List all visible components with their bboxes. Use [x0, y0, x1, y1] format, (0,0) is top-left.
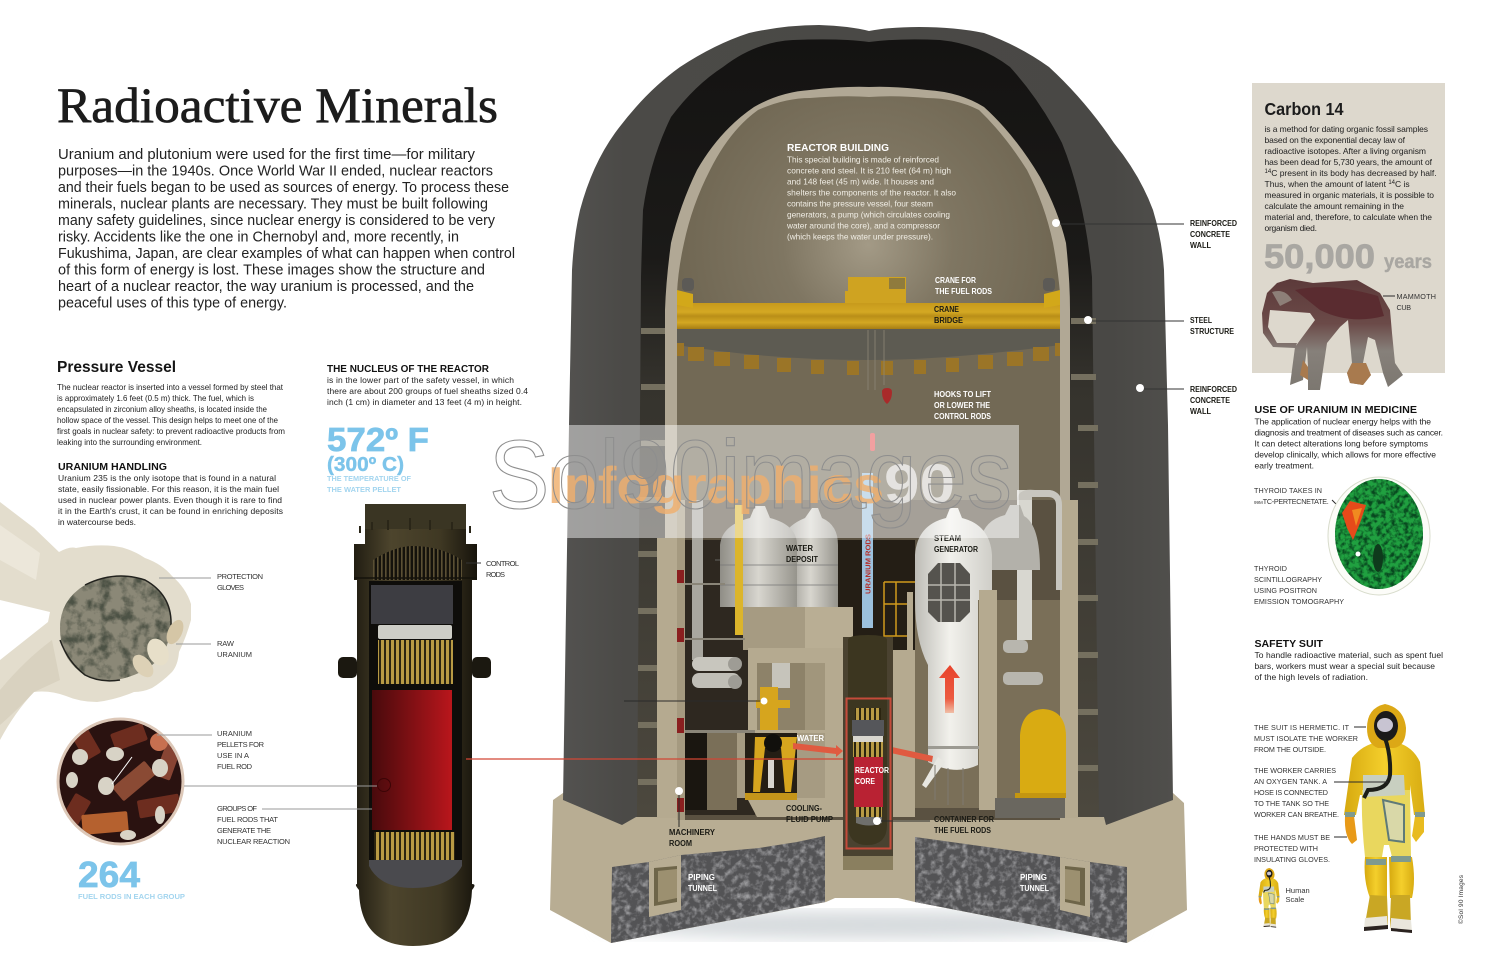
text block: carbon 14: organism died.	[1264, 223, 1317, 233]
label: container: CONTAINER FOR	[934, 815, 994, 824]
machinery dot and leader	[678, 791, 680, 827]
label: reinforced concrete wall top	[1190, 219, 1237, 250]
label: oxygen tank: AN OXYGEN TANK. A	[1254, 777, 1327, 786]
text block: pressure vessel: hollow space of the vessel. This design helps to meet one of the	[57, 415, 278, 425]
text block: safety suit: of the high levels of radiation.	[1254, 672, 1368, 682]
label: reactor building text: generators, a pump (which circulates cooling	[787, 210, 950, 220]
label: cooling-fluid pump: COOLING-	[786, 804, 822, 813]
label: mammoth cub: CUB	[1396, 303, 1411, 312]
label: hands protected: INSULATING GLOVES.	[1254, 855, 1330, 864]
text block: medicine: diagnosis and treatment of diseases such as cancer.	[1254, 428, 1443, 438]
label: raw uranium: RAW	[217, 639, 235, 648]
label: piping tunnel left	[688, 873, 717, 893]
label: reinforced concrete wall lower	[1190, 385, 1237, 416]
label: protection gloves: GLOVES	[217, 583, 244, 592]
label: uranium pellets	[217, 729, 265, 771]
text block: uranium handling: state, easily fissionable. For this reason, it is the main fuel	[58, 484, 279, 494]
text block: pressure vessel: is approximately 1.6 feet (0.5 m) thick. The fuel, which is	[57, 393, 254, 403]
label: suit is hermetic: FROM THE OUTSIDE.	[1254, 745, 1326, 754]
label: thyroid scintillography: EMISSION TOMOGRAPHY	[1254, 597, 1344, 606]
crane supports	[677, 343, 1060, 375]
label: oxygen tank	[1254, 766, 1339, 819]
concrete wall band	[665, 87, 1070, 817]
red boxes	[677, 570, 684, 812]
label: reinforced concrete wall top: REINFORCED	[1190, 219, 1237, 228]
illustration: mammoth cub	[1262, 279, 1403, 390]
panel: safety suit	[1254, 639, 1443, 682]
intro text: of this form of energy is lost. These images show the structure and	[58, 262, 485, 278]
label: uranium pellets: FUEL ROD	[217, 762, 253, 771]
label: container: THE FUEL RODS	[934, 826, 991, 835]
callout: 264 fuel rods: FUEL RODS IN EACH GROUP	[78, 892, 185, 901]
intro text: minerals, nuclear plants are necessary. They must be built following	[58, 196, 488, 212]
label: control rods: CONTROL	[486, 559, 519, 568]
label: mammoth cub	[1383, 292, 1436, 312]
illustration: worker in safety suit	[1344, 704, 1425, 933]
callout: 264 fuel rods	[78, 854, 185, 901]
callout: 264 fuel rods: 264	[78, 854, 140, 895]
label: steam generator: GENERATOR	[934, 545, 978, 554]
left dark room	[685, 540, 755, 815]
outlet arrow	[886, 746, 933, 762]
illustration: gloved hands holding raw uranium	[0, 502, 191, 740]
label: reactor building text: contains the pressure vessel, four steam	[787, 198, 933, 208]
label: hooks: CONTROL RODS	[934, 412, 991, 421]
container dot and leader	[877, 820, 930, 822]
label: mammoth cub: MAMMOTH	[1396, 292, 1436, 301]
label: reactor building text: concrete and steel. It is 210 feet (64 m) high	[787, 166, 951, 176]
panel: pressure vessel text	[57, 359, 285, 447]
label: piping tunnel left: PIPING	[688, 873, 715, 882]
label: hands protected: PROTECTED WITH	[1254, 844, 1318, 853]
valves	[1003, 640, 1028, 653]
label: reactor core: CORE	[855, 777, 875, 786]
water arrow left	[793, 743, 843, 757]
callout: temperature 572 F: (300º C)	[327, 454, 404, 476]
label: uranium pellets: URANIUM	[217, 729, 252, 738]
label: crane for the fuel rods: THE FUEL RODS	[935, 287, 992, 296]
text block: safety suit	[1254, 650, 1443, 682]
label: groups of fuel rods: GENERATE THE	[217, 826, 271, 835]
ladder rungs	[638, 318, 1098, 785]
left pillar	[657, 538, 685, 818]
intro text: heart of a nuclear reactor, the way uranium is processed, and the	[58, 278, 474, 295]
heading: safety suit: SAFETY SUIT	[1254, 639, 1323, 650]
label: thyroid scintillography: USING POSITRON	[1254, 586, 1317, 595]
intro text: Uranium and plutonium were used for the first time—for military	[58, 146, 475, 163]
platform floors	[685, 638, 745, 640]
text block: carbon 14: calculate the amount remaining in the	[1264, 201, 1404, 211]
panel: use of uranium in medicine	[1254, 405, 1443, 470]
label: raw uranium	[217, 639, 252, 659]
label: reactor building text: This special building is made of reinforced	[787, 154, 939, 164]
small core	[852, 708, 884, 826]
label: hooks	[934, 390, 991, 421]
label: reactor building text: shelters the components of the reactor. It also	[787, 188, 956, 198]
label: thyroid scintillography	[1254, 564, 1344, 606]
text block: medicine: It can detect alterations long before symptoms	[1254, 438, 1428, 448]
steam generator	[915, 508, 992, 805]
ground shadow	[599, 911, 1139, 939]
text block: carbon 14: measured in organic materials, it is possible to	[1264, 190, 1434, 200]
text block: nucleus: there are about 200 groups of fuel sheaths sized 0.4	[327, 386, 528, 396]
label: crane bridge: BRIDGE	[934, 316, 963, 325]
text block: pressure vessel: first goals in nuclear safety: to prevent radioactive products from	[57, 426, 285, 436]
callout: 50,000 years: 50,000	[1264, 238, 1375, 276]
right room	[915, 600, 1060, 808]
intro text: and their fuels began to be used as sources of energy. To process these	[58, 179, 509, 196]
intro text	[58, 146, 515, 312]
label: reinforced concrete wall lower: REINFORCED	[1190, 385, 1237, 394]
center dark back	[827, 540, 915, 650]
text block: medicine: develop clinically, which allows for more effective	[1254, 450, 1436, 460]
reactor well	[843, 637, 893, 870]
blue uranium rods bar	[862, 473, 873, 628]
intro text: risky. Accidents like the one in Chernobyl and, more recently, in	[58, 228, 459, 246]
text block: pressure vessel	[57, 382, 285, 447]
beige core walls	[748, 648, 915, 817]
label: hands protected: THE HANDS MUST BE	[1254, 833, 1330, 842]
label: water deposit: DEPOSIT	[786, 555, 818, 564]
label: human scale	[1286, 886, 1310, 904]
label: oxygen tank: THE WORKER CARRIES	[1254, 766, 1336, 775]
text block: uranium handling: used in nuclear power plants. Even though it is rare to find	[58, 495, 282, 505]
granite left	[611, 836, 825, 943]
crane bridge	[677, 277, 1060, 404]
red horizontal line	[466, 758, 846, 760]
label: cooling-fluid pump: FLUID PUMP	[786, 815, 833, 824]
label: oxygen tank: HOSE IS CONNECTED	[1254, 788, 1328, 797]
illustration: uranium pellets circle	[55, 715, 187, 847]
label: steel structure	[1190, 316, 1234, 336]
watermark band: 90	[884, 452, 955, 515]
leader lines: suit	[1334, 727, 1388, 837]
text block: pressure vessel: The nuclear reactor is inserted into a vessel formed by steel that	[57, 382, 284, 392]
label: machinery room: MACHINERY	[669, 828, 716, 837]
dark gap	[637, 39, 1099, 817]
panel: nucleus of the reactor text	[327, 364, 528, 407]
label: piping tunnel right	[1020, 873, 1049, 893]
title: Radioactive Minerals	[57, 77, 498, 133]
label: container	[934, 815, 994, 835]
panel: uranium handling text	[58, 462, 283, 527]
label: steel structure: STEEL	[1190, 316, 1212, 325]
label: thyroid takes in	[1254, 486, 1340, 508]
text block: safety suit: To handle radioactive material, such as spent fuel	[1254, 650, 1443, 660]
text block: carbon 14: based on the exponential decay law of	[1264, 135, 1406, 145]
leader lines: left labels	[157, 563, 481, 809]
intro text: peaceful uses of this type of energy.	[58, 294, 287, 312]
crane cart	[845, 277, 906, 303]
text block: nucleus: is in the lower part of the safety vessel, in which	[327, 375, 514, 385]
label: steam generator	[934, 534, 978, 554]
piping tunnel right	[1060, 857, 1090, 917]
text block: medicine: early treatment.	[1254, 460, 1314, 470]
text block: safety suit: bars, workers must wear a special suit because	[1254, 661, 1435, 671]
label: steel structure: STRUCTURE	[1190, 327, 1234, 336]
label: reinforced concrete wall top: CONCRETE	[1190, 230, 1230, 239]
label: thyroid takes in: THYROID TAKES IN	[1254, 486, 1322, 495]
label: groups of fuel rods: GROUPS OF	[217, 804, 257, 813]
text block: pressure vessel: leaking into the surrounding environment.	[57, 437, 202, 447]
callout: 50,000 years: years	[1384, 252, 1432, 273]
label: cooling-fluid pump	[786, 804, 833, 824]
callout: temperature 572 F: THE WATER PELLET	[327, 485, 401, 494]
label: thyroid takes in: 99MTC-PERTECNETATE.	[1254, 497, 1329, 506]
label: oxygen tank: TO THE TANK SO THE	[1254, 799, 1329, 808]
text block: uranium handling: it in the Earth's crust, it can be found in enriching deposits	[58, 506, 283, 516]
base foundation	[550, 793, 1187, 943]
pressure vessel small	[848, 635, 887, 845]
outer concrete shell	[563, 25, 1173, 825]
text block: uranium handling	[58, 473, 283, 527]
granite right	[915, 837, 1127, 943]
text block: nucleus	[327, 375, 528, 407]
label: control rods: RODS	[486, 570, 505, 579]
callout: temperature 572 F: 572º F	[327, 421, 429, 458]
credit: ©Sol 90 Images	[1457, 874, 1465, 924]
label: reactor core	[855, 766, 889, 786]
label: hooks: HOOKS TO LIFT	[934, 390, 991, 399]
back wall lower	[685, 500, 1060, 820]
intro text: purposes—in the 1940s. Once World War II ended, nuclear reactors	[58, 162, 493, 180]
label: reactor building text: REACTOR BUILDING	[787, 143, 889, 154]
label: human scale: Scale	[1286, 895, 1304, 904]
yellow tank	[1020, 709, 1066, 793]
label: piping tunnel left: TUNNEL	[688, 884, 717, 893]
heading: pressure vessel: Pressure Vessel	[57, 359, 176, 376]
heading: uranium handling: URANIUM HANDLING	[58, 462, 167, 473]
yellow scaffold	[884, 582, 915, 636]
intro text: Fukushima, Japan, are clear examples of what can happen when control	[58, 245, 515, 262]
text block: carbon 14: radioactive isotopes. After a living organism	[1264, 146, 1426, 156]
beige platform	[743, 607, 853, 650]
yellow pipe	[735, 505, 743, 635]
label: reactor building text: water around the core), and a compressor	[786, 220, 940, 230]
label: machinery room: ROOM	[669, 839, 692, 848]
illustration: brain scan	[1328, 477, 1430, 595]
icon: human scale figure	[1258, 868, 1280, 928]
callout: 50,000 years	[1264, 238, 1432, 276]
text block: carbon 14: has been dead for 5,730 years, the amount of	[1264, 157, 1433, 167]
watermark band: Infographics	[548, 457, 884, 515]
label: suit is hermetic: THE SUIT IS HERMETIC. IT	[1254, 723, 1350, 732]
label: reactor building text: (which keeps the water under pressure).	[787, 232, 933, 242]
label: water deposit	[786, 544, 818, 564]
text block: uranium handling: in watercourse beds.	[58, 517, 136, 527]
label: reinforced concrete wall top: WALL	[1190, 241, 1211, 250]
label: thyroid scintillography: SCINTILLOGRAPHY	[1254, 575, 1322, 584]
heading: medicine: USE OF URANIUM IN MEDICINE	[1254, 405, 1417, 416]
callout: temperature 572 F	[327, 421, 429, 494]
uranium rods label: URANIUM RODS	[864, 534, 872, 594]
text block: carbon 14: is a method for dating organic fossil samples	[1264, 124, 1428, 134]
label: steam generator: STEAM	[934, 534, 961, 543]
label: crane bridge: CRANE	[934, 305, 959, 314]
label: control rods	[486, 559, 519, 579]
label: groups of fuel rods: NUCLEAR REACTION	[217, 837, 290, 846]
label: crane for the fuel rods: CRANE FOR	[935, 276, 976, 285]
red frame	[846, 698, 890, 848]
label: reactor building text	[786, 143, 956, 242]
label: groups of fuel rods	[217, 804, 290, 846]
text block: medicine: The application of nuclear energy helps with the	[1254, 416, 1431, 426]
label: water: WATER	[797, 734, 824, 743]
label: oxygen tank: WORKER CAN BREATHE.	[1254, 810, 1339, 819]
label: hands protected	[1254, 833, 1330, 864]
label: machinery room	[669, 828, 716, 848]
label: piping tunnel right: TUNNEL	[1020, 884, 1049, 893]
lower left room	[685, 733, 707, 810]
label: suit is hermetic	[1254, 723, 1358, 754]
text block: carbon 14: 14C present in its body has decreased by half.	[1264, 168, 1437, 178]
intro text: many safety guidelines, since nuclear energy is considered to be very	[58, 212, 495, 229]
label: crane bridge	[934, 305, 963, 325]
beige wall right	[979, 590, 997, 810]
horizontal pipes	[692, 657, 742, 689]
callout: temperature 572 F: THE TEMPERATURE OF	[327, 474, 411, 483]
label: crane for the fuel rods	[935, 276, 992, 296]
text block: nucleus: inch (1 cm) in diameter and 13 feet (4 m) in height.	[327, 397, 522, 407]
pump dot and leader	[624, 700, 764, 702]
label: protection gloves: PROTECTION	[217, 572, 263, 581]
label: raw uranium: URANIUM	[217, 650, 252, 659]
label: protection gloves	[217, 572, 263, 592]
dome interior	[677, 96, 1060, 817]
label: reactor building text: and 148 feet (45 m) wide. It houses and	[787, 176, 934, 186]
cooling pump	[745, 687, 797, 800]
label: piping tunnel right: PIPING	[1020, 873, 1047, 882]
steam generator back	[980, 505, 1040, 570]
water tanks	[715, 506, 838, 607]
label: reinforced concrete wall lower: CONCRETE	[1190, 396, 1230, 405]
label: water deposit: WATER	[786, 544, 813, 553]
illustration: reactor vessel cutaway	[338, 504, 491, 946]
dots and leaders: wall labels	[1052, 219, 1184, 392]
heading: nucleus of the reactor: THE NUCLEUS OF THE REACTOR	[327, 364, 490, 375]
label: reactor core: REACTOR	[855, 766, 889, 775]
text block: carbon 14: Thus, when the amount of latent 14C is	[1264, 179, 1410, 189]
hook	[868, 330, 884, 390]
heading: carbon 14: Carbon 14	[1264, 99, 1344, 119]
text block: pressure vessel: encapsulated in zirconium alloy sheaths, is located inside the	[57, 404, 267, 414]
watermark band: Sol90images	[489, 420, 1012, 529]
label: groups of fuel rods: FUEL RODS THAT	[217, 815, 278, 824]
label: uranium pellets: PELLETS FOR	[217, 740, 265, 749]
piping tunnel left	[649, 855, 681, 917]
illustration: reactor building cutaway	[466, 25, 1187, 943]
text block: medicine	[1254, 416, 1443, 470]
label: human scale: Human	[1286, 886, 1310, 895]
panel: carbon 14	[1252, 83, 1445, 373]
label: thyroid scintillography: THYROID	[1254, 564, 1287, 573]
text block: carbon 14: material and, therefore, to calculate when the	[1264, 212, 1432, 222]
text block: uranium handling: Uranium 235 is the only isotope that is found in a natural	[58, 473, 276, 483]
label: uranium pellets: USE IN A	[217, 751, 249, 760]
right pillar	[1060, 500, 1078, 818]
label: hooks: OR LOWER THE	[934, 401, 990, 410]
text block: carbon 14	[1264, 124, 1437, 233]
label: reinforced concrete wall lower: WALL	[1190, 407, 1211, 416]
label: suit is hermetic: MUST ISOLATE THE WORKER	[1254, 734, 1358, 743]
